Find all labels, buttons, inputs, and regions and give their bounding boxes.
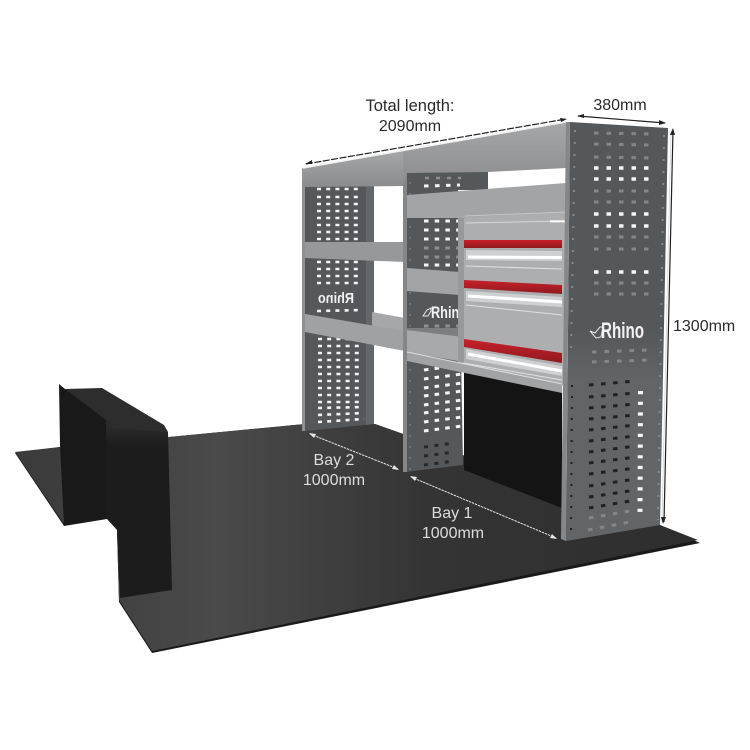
shelf 2, bay 1 xyxy=(407,183,566,218)
shelf 2, bay 2 xyxy=(305,242,405,262)
dimension: bay 2 xyxy=(303,433,399,489)
end panel xyxy=(561,122,668,541)
van racking diagram xyxy=(15,99,734,653)
mirrored logo: Rhino xyxy=(318,290,354,307)
dimension: total length: 2090mm xyxy=(379,118,441,135)
shelf 3, bay 2 xyxy=(305,312,405,351)
dimension: depth 380mm xyxy=(577,97,666,125)
top beam, bay 2 xyxy=(302,150,405,187)
dimension: bay 1 xyxy=(410,476,557,542)
bulkhead xyxy=(59,384,172,598)
shelf 4, bay 1 xyxy=(407,328,463,362)
dimension: bay 1: Bay 1 xyxy=(432,505,473,522)
dimension: bay 1: 1000mm xyxy=(422,525,484,542)
drawer 3 xyxy=(463,339,562,380)
dimension: bay 2: Bay 2 xyxy=(314,452,355,469)
shelf 3, bay 1 xyxy=(407,268,460,295)
logo: Rhino xyxy=(590,318,644,343)
top beam, bay 1 xyxy=(303,122,566,186)
drawer cabinet xyxy=(407,212,566,393)
clipped logo xyxy=(422,306,458,318)
dimension: bay 2: 1000mm xyxy=(303,472,365,489)
dimension: total length xyxy=(305,97,567,164)
dimension: depth 380mm: 380mm xyxy=(593,97,647,114)
dimension: height 1300mm xyxy=(661,128,735,524)
middle upright, bay 1 xyxy=(403,150,488,472)
drawer 2 xyxy=(464,280,562,315)
dimension: height 1300mm: 1300mm xyxy=(673,318,735,335)
rear upright, bay 2 xyxy=(302,158,374,431)
drawer 1 xyxy=(464,240,562,269)
floor panel xyxy=(15,424,700,653)
black storage void xyxy=(464,372,562,508)
clipped logo: Rhino xyxy=(431,303,467,322)
logo: Rhino: Rhino xyxy=(601,318,644,343)
dimension: total length: Total length: xyxy=(366,97,454,115)
